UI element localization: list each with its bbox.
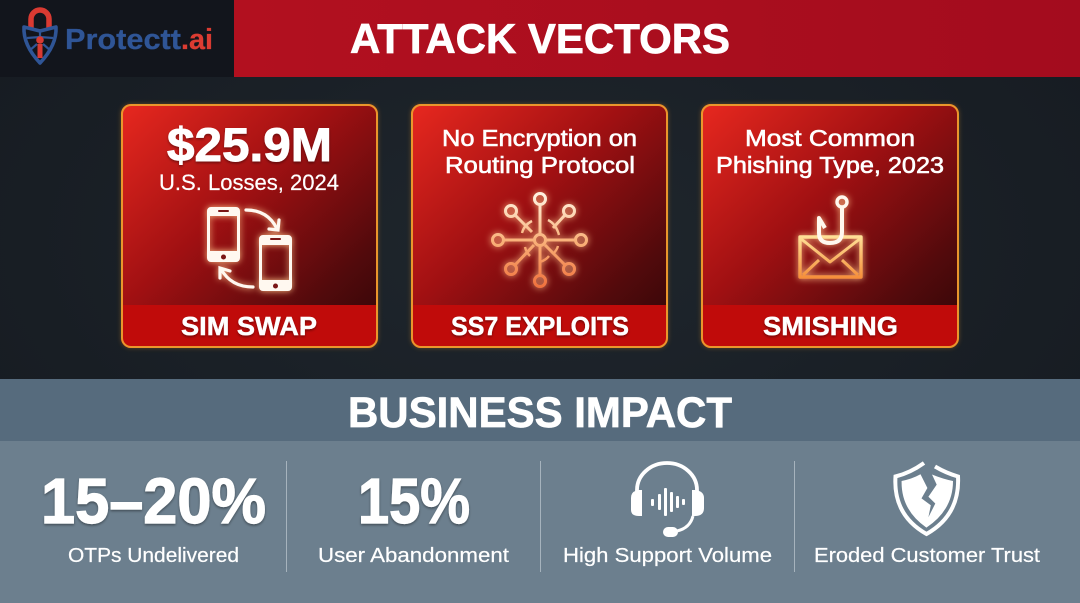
stat: $25.9M: $25.9M bbox=[167, 118, 332, 171]
text: most common: Most Common bbox=[745, 125, 915, 151]
text: most common bbox=[716, 125, 944, 178]
label: smishing: SMISHING bbox=[763, 311, 898, 341]
metric: OTPs undelivered: 15–20% bbox=[41, 465, 266, 537]
text: U.S. losses: U.S. Losses, 2024 bbox=[159, 170, 339, 195]
metric: user abandonment: 15% bbox=[358, 465, 470, 537]
icon: hook and envelope bbox=[800, 197, 861, 277]
metric: eroded customer trust bbox=[814, 463, 1040, 567]
text: most common: Phishing Type, 2023 bbox=[716, 152, 944, 178]
panel: smishing bbox=[701, 104, 959, 348]
text: no encryption: No Encryption on bbox=[442, 125, 637, 151]
panel: SS7 exploits bbox=[411, 104, 668, 348]
heading text: BUSINESS IMPACT bbox=[348, 389, 732, 437]
logo: Protectt.ai: Protectt bbox=[65, 24, 181, 56]
metric: high support volume bbox=[563, 463, 772, 567]
metric: user abandonment: User Abandonment bbox=[318, 545, 509, 567]
metric: OTPs undelivered bbox=[41, 465, 266, 567]
heading band: business impact bbox=[0, 379, 1080, 441]
panel: SIM swap bbox=[121, 104, 378, 348]
icon: network nodes bbox=[492, 194, 586, 286]
logo: Protectt.ai: .ai bbox=[181, 24, 213, 56]
icon: headset bbox=[631, 463, 704, 537]
metric: user abandonment bbox=[318, 465, 509, 567]
panel: impact metrics bbox=[0, 441, 1080, 603]
icon: swapping phones bbox=[207, 207, 292, 291]
label: SS7 exploits: SS7 EXPLOITS bbox=[451, 311, 629, 341]
text: no encryption bbox=[442, 125, 637, 178]
icon: shield padlock bbox=[24, 10, 56, 63]
logo: Protectt.ai bbox=[24, 10, 213, 63]
text: no encryption: Routing Protocol bbox=[445, 152, 635, 178]
label: SIM swap: SIM SWAP bbox=[181, 311, 317, 341]
icon: cracked shield bbox=[895, 463, 958, 534]
metric: eroded customer trust: Eroded Customer Trust bbox=[814, 545, 1040, 567]
metric: high support volume: High Support Volume bbox=[563, 545, 772, 567]
header bar bbox=[0, 0, 1080, 77]
title: attack vectors: ATTACK VECTORS bbox=[350, 15, 730, 62]
metric: OTPs undelivered: OTPs Undelivered bbox=[68, 545, 239, 567]
